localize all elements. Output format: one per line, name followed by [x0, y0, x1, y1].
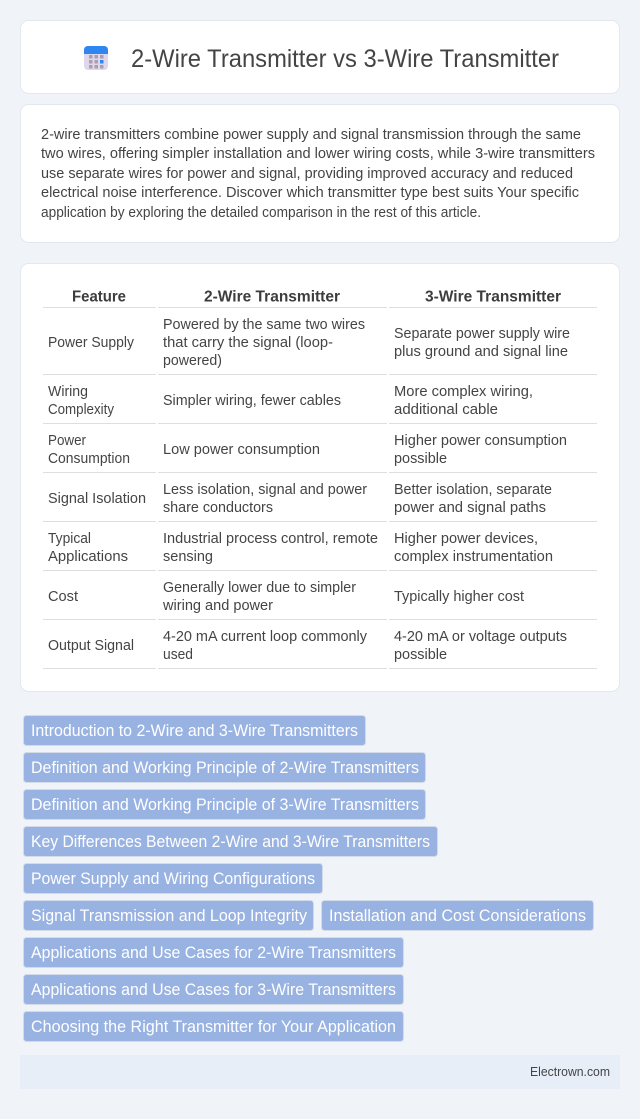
- panel: title header: [20, 20, 620, 94]
- tag: 2-wire applications: [24, 938, 404, 968]
- row: wiring complexity: More complex wiring,: [394, 384, 533, 400]
- row: power consumption: [48, 433, 567, 467]
- tag: key differences: Key Differences Between 2-Wire and 3-Wire Transmitters: [31, 832, 430, 851]
- row: power consumption: Low power consumption: [163, 442, 320, 458]
- intro paragraph: application by exploring the detailed comparison in the rest of this article.: [41, 205, 481, 221]
- footer: Electrown.com: [530, 1065, 610, 1079]
- row: power consumption: possible: [394, 451, 447, 467]
- intro paragraph: 2-wire transmitters combine power supply and signal transmission through the same: [41, 127, 581, 143]
- tag: choosing: Choosing the Right Transmitter for Your Application: [31, 1017, 396, 1036]
- row: typical applications: complex instrumentation: [394, 549, 553, 565]
- tag: 3-wire applications: [24, 974, 404, 1004]
- row: output signal: 4-20 mA or voltage outputs: [394, 629, 567, 645]
- tag: 2-wire definition: Definition and Working Principle of 2-Wire Transmitters: [31, 758, 419, 777]
- tag: 3-wire definition: [24, 790, 426, 820]
- row: power supply: [48, 317, 570, 369]
- footer: [20, 1055, 620, 1089]
- tag: power supply: Power Supply and Wiring Configurations: [31, 869, 315, 888]
- intro paragraph: use separate wires for power and signal, providing improved accuracy and reduced: [41, 166, 573, 182]
- panel: introduction: [20, 104, 620, 242]
- title: 2-Wire Transmitter vs 3-Wire Transmitter: [131, 45, 559, 73]
- row: typical applications: Higher power devices,: [394, 531, 538, 547]
- row: wiring complexity: additional cable: [394, 402, 498, 418]
- intro paragraph: two wires, offering simpler installation and lower wiring costs, while 3-wire transmitters: [41, 146, 595, 162]
- tag: installation: Installation and Cost Considerations: [329, 906, 586, 925]
- row: power supply: powered): [163, 353, 222, 369]
- row: output signal: Output Signal: [48, 638, 134, 654]
- tag: power supply: [24, 864, 322, 894]
- row: power consumption: Higher power consumption: [394, 433, 567, 449]
- row: output signal: used: [163, 647, 193, 663]
- row: power supply: Power Supply: [48, 335, 135, 351]
- table header: 3-Wire Transmitter: [425, 288, 561, 306]
- row: power supply: plus ground and signal line: [394, 344, 568, 360]
- table header: Feature: [72, 288, 126, 306]
- row: cost: Generally lower due to simpler: [163, 580, 356, 596]
- icon: calendar: [84, 46, 108, 70]
- row: signal isolation: Less isolation, signal and power: [163, 482, 367, 498]
- tag: installation: [322, 900, 594, 930]
- tag: 2-wire applications: Applications and Use Cases for 2-Wire Transmitters: [31, 943, 396, 962]
- row: wiring complexity: [48, 384, 533, 418]
- row: typical applications: [48, 531, 553, 565]
- row: output signal: possible: [394, 647, 447, 663]
- tag: signal transmission: [24, 900, 314, 930]
- row: typical applications: Typical: [48, 531, 91, 547]
- tag: signal transmission: Signal Transmission and Loop Integrity: [31, 906, 308, 925]
- row: output signal: 4-20 mA current loop commonly: [163, 629, 368, 645]
- panel: comparison table: [20, 264, 620, 692]
- row: signal isolation: Signal Isolation: [48, 491, 146, 507]
- row: signal isolation: Better isolation, separate: [394, 482, 552, 498]
- row: signal isolation: share conductors: [163, 500, 273, 516]
- tag: 3-wire applications: Applications and Use Cases for 3-Wire Transmitters: [31, 980, 396, 999]
- row: signal isolation: power and signal paths: [394, 500, 546, 516]
- row: power consumption: Power: [48, 433, 86, 449]
- intro paragraph: [41, 127, 595, 221]
- tag: key differences: [24, 826, 438, 856]
- row: output signal: [48, 629, 567, 663]
- tag: introduction: [24, 716, 366, 746]
- row: wiring complexity: Wiring: [48, 384, 88, 400]
- row: cost: Typically higher cost: [394, 589, 524, 605]
- row: cost: wiring and power: [162, 598, 273, 614]
- topic tags: [24, 716, 594, 1042]
- intro paragraph: electrical noise interference. Discover which transmitter type best suits Your specific: [41, 185, 579, 201]
- tag: introduction: Introduction to 2-Wire and 3-Wire Transmitters: [31, 721, 358, 740]
- row: cost: [48, 580, 524, 614]
- row: power consumption: Consumption: [48, 451, 130, 467]
- tag: 2-wire definition: [24, 752, 426, 782]
- table header: 2-Wire Transmitter: [204, 288, 340, 306]
- tag: choosing: [24, 1012, 404, 1042]
- row: power supply: Powered by the same two wires: [163, 317, 365, 333]
- row: power supply: that carry the signal (loop-: [163, 335, 333, 351]
- row: wiring complexity: Complexity: [48, 402, 115, 418]
- row: wiring complexity: Simpler wiring, fewer cables: [163, 393, 341, 409]
- row: typical applications: Industrial process control, remote: [163, 531, 378, 547]
- row: typical applications: sensing: [163, 549, 213, 565]
- row: power supply: Separate power supply wire: [394, 326, 570, 342]
- table header: [72, 288, 561, 306]
- row: signal isolation: [48, 482, 552, 516]
- tag: 3-wire definition: Definition and Working Principle of 3-Wire Transmitters: [31, 795, 419, 814]
- row: cost: Cost: [48, 589, 78, 605]
- row: typical applications: Applications: [48, 549, 128, 565]
